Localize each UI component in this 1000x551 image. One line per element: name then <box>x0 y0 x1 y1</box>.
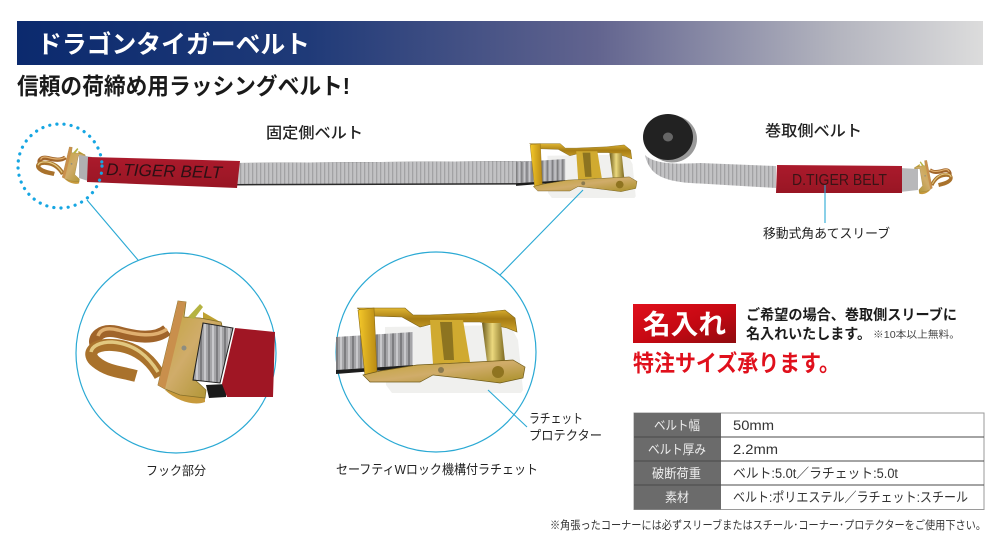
ratchet caption: セーフティWロック機構付ラチェット <box>336 462 538 477</box>
row: material: 素材 <box>665 490 689 505</box>
row: belt width <box>654 418 774 433</box>
dotted highlight circle <box>18 124 102 208</box>
gray webbing <box>193 323 233 383</box>
webbing curve <box>645 155 776 188</box>
leader line: sleeve <box>824 185 826 223</box>
protector label: ラチェット <box>529 411 583 426</box>
leader line: protector <box>488 390 527 427</box>
red sleeve <box>222 328 275 397</box>
sleeve label: 移動式角あてスリーブ <box>763 226 890 241</box>
row: breaking load: ベルト:5.0t／ラチェット:5.0t <box>733 466 898 481</box>
name-printing description <box>746 306 960 343</box>
row: belt thickness: ベルト厚み <box>648 442 706 457</box>
row: belt thickness <box>648 442 778 457</box>
short webbing behind sleeve <box>79 155 92 181</box>
title banner <box>17 21 983 65</box>
heading: take-up-side belt: 巻取側ベルト <box>765 122 862 140</box>
name-printing badge <box>633 304 736 343</box>
leader line: hook <box>87 200 138 260</box>
black belt roll <box>643 114 697 162</box>
protector label <box>529 411 602 443</box>
red sleeve with brand text: D.TIGER BELT <box>792 172 887 189</box>
take-up-side belt photo <box>643 114 951 194</box>
detail circle: hook <box>76 253 276 453</box>
end hook <box>38 147 85 184</box>
custom-size callout: 特注サイズ承ります。 <box>633 350 840 376</box>
row: breaking load: 破断荷重 <box>652 466 701 481</box>
name-printing badge: 名入れ <box>643 310 726 340</box>
leader line: ratchet <box>500 190 583 275</box>
sleeve webbing end <box>900 168 918 192</box>
hook caption: フック部分 <box>146 464 206 478</box>
webbing strap <box>235 161 535 186</box>
name-printing description: 名入れいたします。 <box>746 325 871 343</box>
red sleeve with brand text <box>87 157 240 188</box>
ratchet <box>516 144 637 198</box>
fixed-side belt photo <box>38 144 637 198</box>
protector label: プロテクター <box>529 428 602 443</box>
ratchet mechanism <box>336 308 525 393</box>
name-printing description: ご希望の場合、巻取側スリーブに <box>746 306 957 324</box>
spec table <box>634 413 984 510</box>
name-printing description: ※10本以上無料。 <box>873 328 960 341</box>
hook metal <box>91 301 222 404</box>
end hook mirrored <box>914 160 951 194</box>
row: belt width: ベルト幅 <box>654 418 700 433</box>
red sleeve with brand text <box>776 165 902 193</box>
black underside <box>206 384 226 398</box>
heading: fixed-side belt: 固定側ベルト <box>266 124 363 142</box>
title banner: ドラゴンタイガーベルト <box>37 30 310 59</box>
detail circle: ratchet <box>336 252 536 452</box>
row: material: ベルト:ポリエステル／ラチェット:スチール <box>733 490 968 505</box>
row: belt width: 50mm <box>733 418 774 433</box>
subtitle: 信頼の荷締め用ラッシングベルト! <box>17 73 350 99</box>
row: belt thickness: 2.2mm <box>733 442 778 457</box>
red sleeve with brand text: D.TIGER BELT <box>106 160 224 182</box>
row: breaking load <box>652 466 898 481</box>
